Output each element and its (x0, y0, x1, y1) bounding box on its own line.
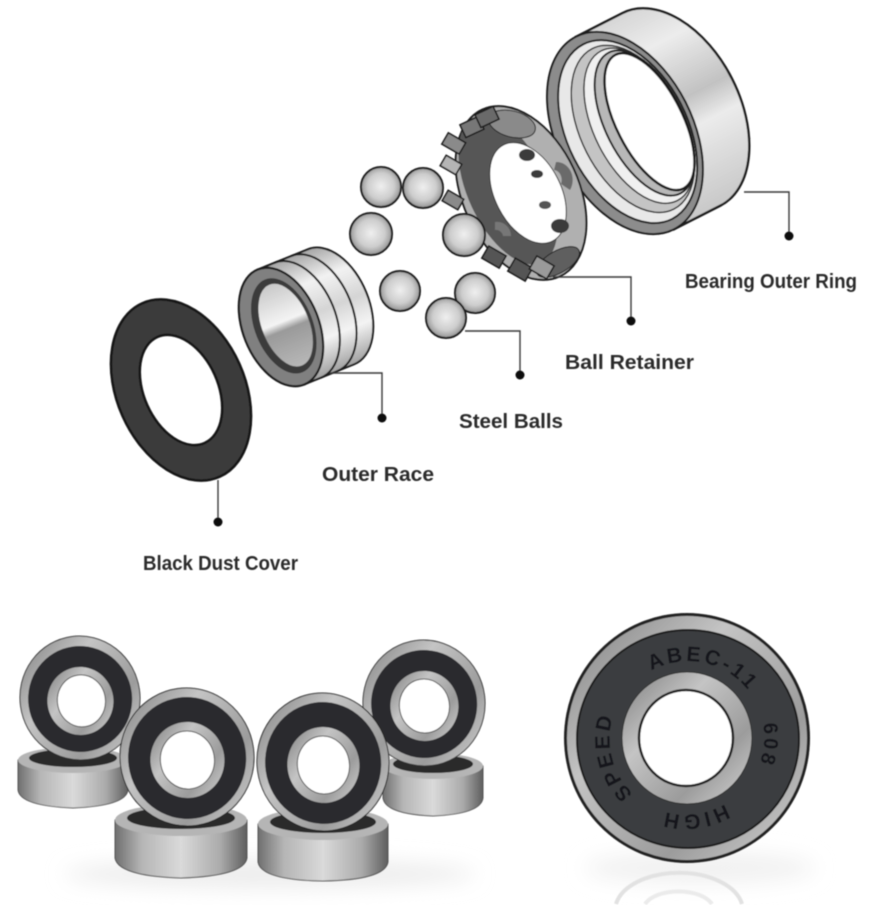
part: ball retainer (430, 85, 612, 301)
photo: standing bearing back left (12, 628, 148, 768)
engraved text: SPEED: SPEED (594, 716, 631, 802)
photo: large bearing close-up (563, 612, 811, 864)
part: bearing outer ring (515, 0, 781, 260)
leader: ball retainer (553, 277, 636, 326)
photo: standing bearing front right (248, 684, 398, 840)
engraved text: 608: 608 (761, 723, 778, 765)
label: steel balls: Steel Balls (459, 411, 563, 433)
part: steel balls (350, 167, 495, 338)
reflection of large bearing (616, 873, 742, 904)
photo: lying bearing front left (115, 804, 247, 878)
leader: outer race (330, 373, 386, 422)
photo: standing bearing front left (111, 679, 263, 835)
leader: bearing outer ring (744, 192, 794, 240)
leader: black dust cover (214, 480, 222, 526)
label: black dust cover: Black Dust Cover (143, 553, 298, 575)
photo: lying bearing back left (18, 747, 128, 808)
label: ball retainer: Ball Retainer (565, 352, 694, 374)
photo: standing bearing back right (355, 632, 493, 774)
engraved text: ABEC-11: ABEC-11 (650, 646, 756, 690)
part: outer race (223, 235, 390, 399)
label: bearing outer ring: Bearing Outer Ring (685, 271, 857, 293)
photo: lying bearing front right (258, 808, 388, 881)
part: black dust cover (84, 277, 278, 503)
label: outer race: Outer Race (322, 464, 434, 486)
engraved text: HIGH: HIGH (664, 805, 730, 830)
photo: lying bearing back right (383, 753, 483, 816)
leader: steel balls (465, 331, 524, 380)
soft floor shadow (65, 852, 815, 888)
